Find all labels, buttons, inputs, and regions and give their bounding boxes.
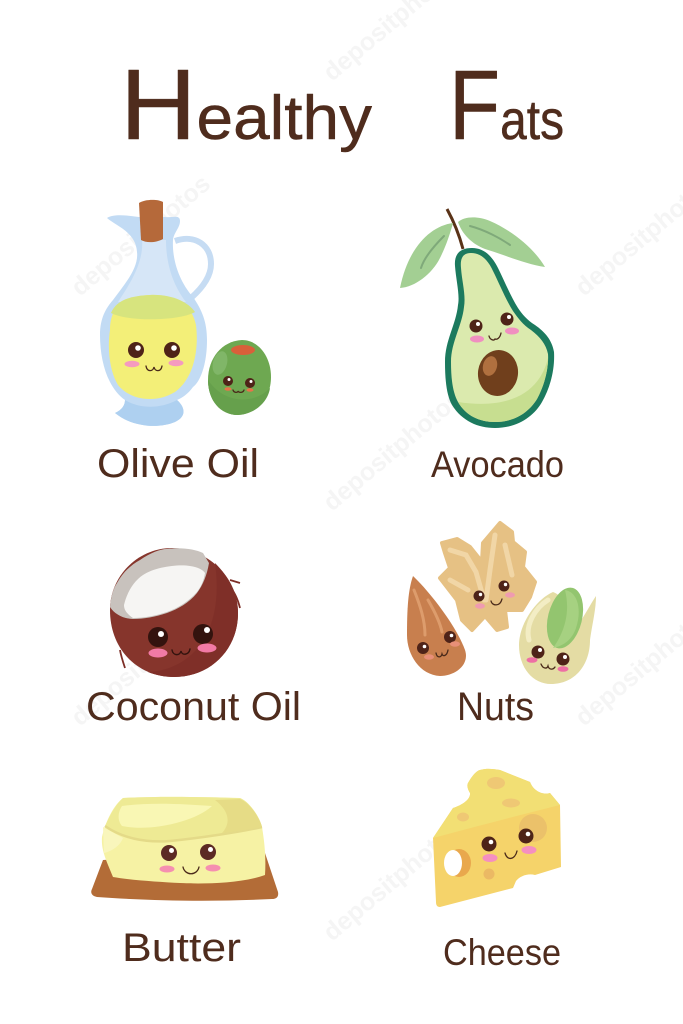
icon: oil jug xyxy=(100,200,211,426)
panel: nuts xyxy=(407,523,596,729)
icon: cork xyxy=(139,200,163,242)
panel: olive oil xyxy=(97,200,271,486)
title: Healthy xyxy=(120,49,372,161)
label: coconut oil: Coconut Oil xyxy=(86,685,301,729)
title: Fats xyxy=(449,50,564,160)
icon: coconut xyxy=(110,548,240,677)
panel: coconut oil xyxy=(86,548,301,729)
text: depositphotos xyxy=(318,814,468,947)
text: depositphotos xyxy=(66,169,216,302)
panel: butter xyxy=(91,797,278,970)
label: avocado: Avocado xyxy=(431,444,564,485)
text: depositphotos xyxy=(318,384,468,517)
icon: stem and leaves xyxy=(400,209,545,288)
label: butter: Butter xyxy=(122,926,241,970)
label: cheese: Cheese xyxy=(443,932,561,973)
icon: pistachio xyxy=(519,584,596,684)
label: olive oil: Olive Oil xyxy=(97,442,259,486)
icon: cheese wedge xyxy=(433,769,561,907)
icon: walnut xyxy=(440,523,535,630)
panel: cheese xyxy=(433,769,561,973)
icon: olive xyxy=(208,340,271,415)
title xyxy=(120,49,564,161)
icon: avocado pit xyxy=(475,347,521,399)
icon: butter block xyxy=(102,797,265,883)
label: nuts: Nuts xyxy=(457,685,534,729)
icon: avocado xyxy=(445,248,554,428)
icon: almond xyxy=(407,576,466,676)
text: depositphotos xyxy=(66,599,216,732)
panel: avocado xyxy=(400,209,564,485)
icon: wooden board xyxy=(91,850,278,901)
